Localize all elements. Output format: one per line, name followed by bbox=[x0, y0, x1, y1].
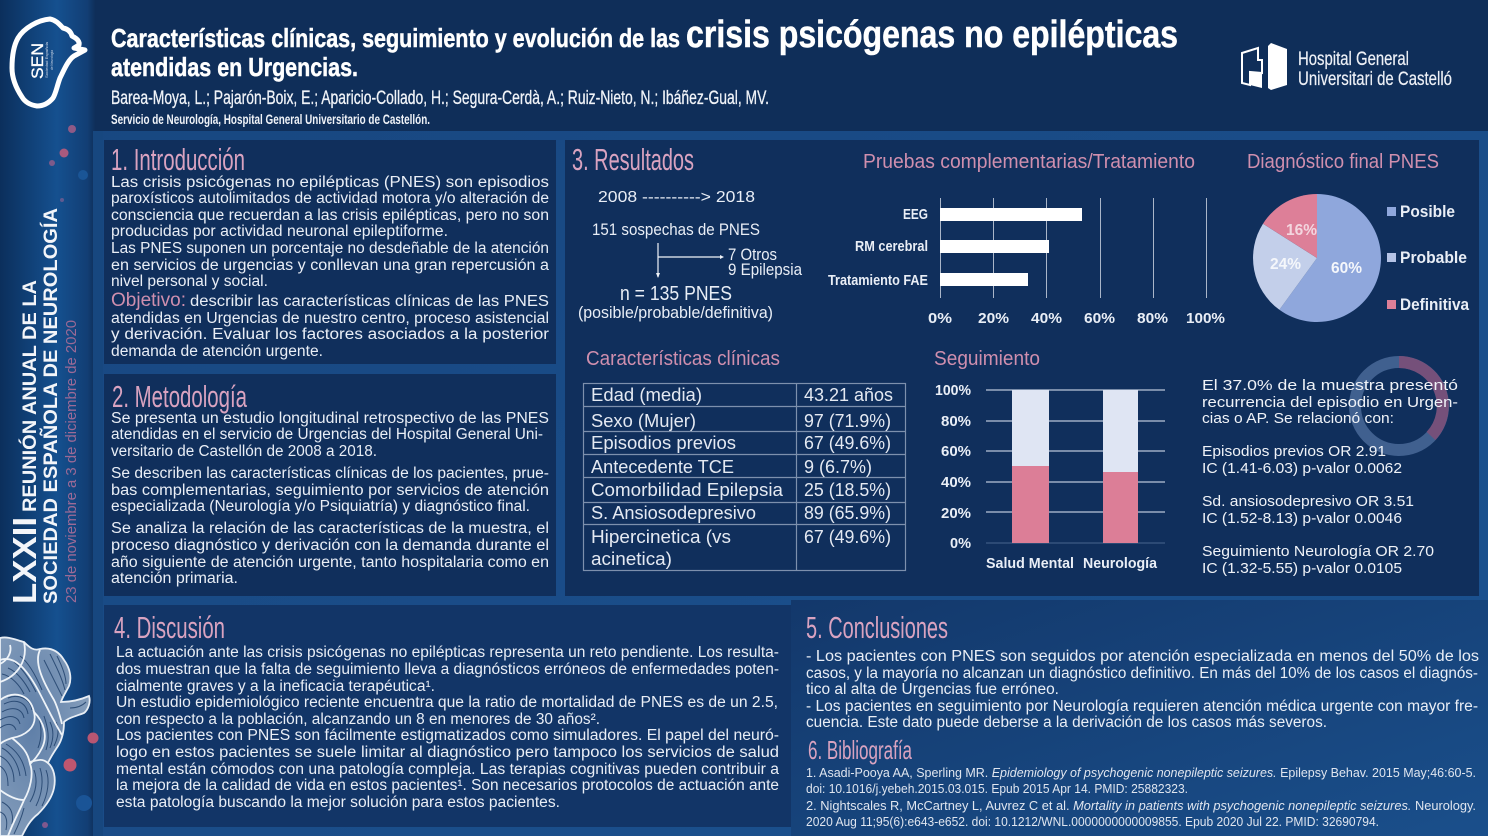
text block: recurrencia: Sd. ansiosodepresivo OR 3.51 bbox=[1202, 493, 1414, 510]
text block: bibliografía: 1. Asadi-Pooya AA, Sperling MR. Epidemiology of psychogenic nonepileptic seizures. Epilepsy Behav. 2015 May;46:60-5. bbox=[806, 766, 1476, 780]
bar chart: pruebas complementarias: Tratamiento FAE bbox=[828, 272, 928, 289]
pie chart: diagnóstico final: 24% bbox=[1270, 256, 1301, 273]
text block: introducción: atendidas en Urgencias de nuestro centro, proceso asistencial bbox=[111, 310, 549, 327]
text block: recurrencia: El 37.0% de la muestra presentó bbox=[1202, 377, 1458, 394]
decorative dots bbox=[42, 125, 98, 828]
text block: metodología: atención primaria. bbox=[111, 570, 238, 587]
text block: introducción: paroxísticos autolimitados de actividad motora y/o alteración de bbox=[111, 190, 549, 207]
text block: recurrencia bbox=[1202, 377, 1458, 577]
stacked bar chart: seguimiento bbox=[935, 382, 1165, 572]
pie chart: diagnóstico final: 16% bbox=[1286, 222, 1317, 239]
header band bbox=[95, 0, 1488, 131]
table: características clínicas: acinetica) bbox=[591, 549, 672, 569]
text block: introducción: y derivación. Evaluar los factores asociados a la posterior bbox=[111, 326, 549, 343]
patient flow diagram: (posible/probable/definitiva) bbox=[578, 303, 773, 322]
sidebar conference title: SOCIEDAD ESPAÑOLA DE NEUROLOGÍA bbox=[40, 208, 62, 604]
heading: discusión: 4. Discusión bbox=[114, 610, 225, 645]
stacked bar chart: seguimiento: 20% bbox=[941, 505, 971, 522]
text block: introducción: Las crisis psicógenas no epilépticas (PNES) son episodios bbox=[111, 174, 549, 191]
patient flow diagram: 9 Epilepsia bbox=[728, 260, 802, 279]
heading: resultados: 3. Resultados bbox=[572, 142, 694, 177]
stacked bar chart: seguimiento: 0% bbox=[950, 535, 971, 552]
table: características clínicas: Edad (media) bbox=[591, 385, 702, 405]
table: características clínicas bbox=[584, 383, 906, 570]
text block: introducción: Las PNES suponen un porcentaje no desdeñable de la atención bbox=[111, 240, 549, 257]
heading: conclusiones: 5. Conclusiones bbox=[806, 610, 948, 645]
text block: recurrencia: IC (1.32-5.55) p-valor 0.0105 bbox=[1202, 560, 1402, 577]
stacked bar chart: seguimiento: Neurología bbox=[1083, 555, 1158, 572]
sidebar conference title: REUNIÓN ANUAL DE LA bbox=[19, 280, 41, 512]
bar chart: pruebas complementarias: 60% bbox=[1084, 310, 1115, 327]
patient flow diagram: n = 135 PNES bbox=[620, 283, 732, 305]
stacked bar chart: seguimiento: 40% bbox=[941, 474, 971, 491]
text block: introducción: nivel personal y social. bbox=[111, 273, 268, 290]
table: características clínicas: Hipercinetica (vs bbox=[591, 527, 731, 547]
affiliation: Servicio de Neurología, Hospital General Universitario de Castellón. bbox=[111, 112, 430, 127]
text block: conclusiones: tico al alta de Urgencias fue erróneo. bbox=[806, 681, 1059, 698]
stacked bar chart: seguimiento: 100% bbox=[935, 382, 971, 399]
stacked bar chart: seguimiento: 80% bbox=[941, 413, 971, 430]
heading: metodología: 2. Metodología bbox=[112, 379, 247, 414]
table: características clínicas: 43.21 años bbox=[804, 385, 893, 405]
pie legend: Posible bbox=[1400, 202, 1455, 221]
text block: bibliografía: 2. Nightscales R, McCartney L, Auvrez C et al. Mortality in patients with psychogenic nonepileptic seizures. Neurology. bbox=[806, 799, 1476, 813]
text block: discusión: La actuación ante las crisis psicógenas no epilépticas representa un reto pendiente. Los resulta- bbox=[116, 644, 779, 661]
stacked bar chart: seguimiento: 60% bbox=[941, 443, 971, 460]
sidebar conference title: LXXII bbox=[6, 517, 43, 604]
table: características clínicas: S. Ansiosodepresivo bbox=[591, 503, 756, 523]
text block: recurrencia: recurrencia del episodio en Urgen- bbox=[1202, 394, 1458, 411]
text block: conclusiones: cuencia. Este dato puede deberse a la derivación de los casos más severos. bbox=[806, 714, 1327, 731]
title bbox=[111, 14, 1178, 82]
patient flow diagram: 2008 ----------> 2018 bbox=[598, 189, 755, 206]
text block: metodología: atendidas en el servicio de Urgencias del Hospital General Uni- bbox=[111, 426, 543, 443]
bar chart: pruebas complementarias: EEG bbox=[903, 206, 928, 223]
text block: discusión: con respecto a la población, alcanzando un 8 en menores de 30 años². bbox=[116, 711, 600, 728]
patient flow diagram: 151 sospechas de PNES bbox=[592, 220, 760, 239]
text block: discusión: logo en estos pacientes se suele limitar al diagnóstico pero tampoco los servicios de salud bbox=[116, 744, 779, 761]
text block: introducción: consciencia que recuerdan a las crisis epilépticas, pero no son bbox=[111, 207, 549, 224]
panel: conclusiones y bibliografía bbox=[791, 600, 1488, 836]
donut chart: recurrencia bbox=[1355, 362, 1443, 450]
text block: introducción: describir las características clínicas de las PNES bbox=[190, 293, 549, 310]
text block: discusión: Un estudio epidemiológico reciente encuentra que la ratio de mortalidad de PNES es de un 2.5, bbox=[116, 694, 778, 711]
patient flow diagram bbox=[578, 189, 802, 322]
patient flow diagram: 7 Otros bbox=[728, 245, 777, 264]
authors: Barea-Moya, L.; Pajarón-Boix, E.; Aparicio-Collado, H.; Segura-Cerdà, A.; Ruiz-Nieto, N.; Ibáñez-Gual, MV. bbox=[111, 88, 769, 109]
text block: introducción: en servicios de urgencias y conllevan una gran repercusión a bbox=[111, 257, 549, 274]
text block: bibliografía: 2020 Aug 11;95(6):e643-e652. doi: 10.1212/WNL.0000000000009855. Epub 2020 Jul 22. PMID: 32690794. bbox=[806, 815, 1379, 829]
sidebar conference title bbox=[6, 208, 80, 604]
text block: introducción: producidas por actividad neuronal epileptiforme. bbox=[111, 223, 448, 240]
text block: bibliografía bbox=[806, 766, 1476, 829]
heading: introducción: 1. Introducción bbox=[111, 142, 245, 177]
bar chart: pruebas complementarias: 0% bbox=[928, 310, 952, 327]
heading: pruebas complementarias: Pruebas complementarias/Tratamiento bbox=[863, 151, 1195, 173]
brain illustration bbox=[0, 637, 90, 836]
table: características clínicas: 25 (18.5%) bbox=[804, 480, 891, 500]
bar chart: pruebas complementarias: RM cerebral bbox=[855, 238, 928, 255]
logo: SEN: SEN bbox=[28, 43, 47, 79]
stacked bar chart: seguimiento: Salud Mental bbox=[986, 555, 1074, 572]
pie chart: diagnóstico final bbox=[1253, 194, 1469, 322]
logo: SEN: de Neurología bbox=[49, 49, 54, 70]
sidebar conference title: 23 de noviembre a 3 de diciembre de 2020 bbox=[64, 320, 80, 603]
bar chart: pruebas complementarias: 80% bbox=[1137, 310, 1168, 327]
text block: introducción: Objetivo: bbox=[111, 290, 186, 311]
text block: recurrencia: IC (1.52-8.13) p-valor 0.0046 bbox=[1202, 510, 1402, 527]
bar chart: pruebas complementarias: 40% bbox=[1031, 310, 1062, 327]
bar chart: pruebas complementarias: 20% bbox=[978, 310, 1009, 327]
table: características clínicas: Antecedente TCE bbox=[591, 457, 734, 477]
table: características clínicas: Episodios previos bbox=[591, 433, 736, 453]
text block: discusión: la mejora de la calidad de vida en estos pacientes¹. Son necesarios protocolos de actuación ante bbox=[116, 777, 779, 794]
table: características clínicas: Sexo (Mujer) bbox=[591, 411, 696, 431]
hospital logo: Universitari de Castelló bbox=[1298, 69, 1452, 90]
table: características clínicas: 97 (71.9%) bbox=[804, 411, 891, 431]
panel: metodología bbox=[104, 374, 556, 596]
text block: introducción: demanda de atención urgente. bbox=[111, 343, 323, 360]
text block: metodología: bas complementarias, seguimiento por servicios de atención bbox=[111, 482, 549, 499]
text block: recurrencia: IC (1.41-6.03) p-valor 0.0062 bbox=[1202, 460, 1402, 477]
text block: discusión: Los pacientes con PNES son fácilmente estigmatizados como simuladores. El papel del neuró- bbox=[116, 727, 779, 744]
hospital logo bbox=[1242, 43, 1452, 90]
heading: bibliografía: 6. Bibliografía bbox=[808, 735, 912, 765]
text block: discusión: dos muestran que la falta de seguimiento lleva a diagnósticos erróneos de enfermedades poten- bbox=[116, 661, 779, 678]
panel: resultados bbox=[565, 140, 1479, 596]
text block: metodología bbox=[111, 410, 549, 587]
text block: conclusiones: casos, y la mayoría no alcanzan un diagnóstico definitivo. En más del 10% de los casos el diagnós- bbox=[806, 665, 1478, 682]
heading: diagnóstico final: Diagnóstico final PNES bbox=[1247, 151, 1439, 173]
text block: metodología: Se analiza la relación de las características de la muestra, el bbox=[111, 520, 549, 537]
text block: metodología: Se presenta un estudio longitudinal retrospectivo de las PNES bbox=[111, 410, 549, 427]
table: características clínicas: Comorbilidad Epilepsia bbox=[591, 480, 784, 500]
text block: discusión: cialmente graves y a la ineficacia terapéutica¹. bbox=[116, 678, 435, 695]
bar chart: pruebas complementarias bbox=[828, 198, 1225, 327]
pie legend bbox=[1387, 202, 1469, 314]
text block: recurrencia: Episodios previos OR 2.91 bbox=[1202, 443, 1386, 460]
text block: metodología: año siguiente de atención urgente, tanto hospitalaria como en bbox=[111, 554, 549, 571]
pie chart: diagnóstico final: 60% bbox=[1331, 260, 1362, 277]
table: características clínicas: 9 (6.7%) bbox=[804, 457, 872, 477]
title: Características clínicas, seguimiento y evolución de las bbox=[111, 23, 680, 53]
text block: discusión: mental están cómodos con una patología compleja. Las terapias cognitivas pueden contribuir a bbox=[116, 761, 779, 778]
logo: SEN bbox=[12, 19, 85, 106]
text block: recurrencia: Seguimiento Neurología OR 2.70 bbox=[1202, 543, 1434, 560]
title: crisis psicógenas no epilépticas bbox=[686, 14, 1178, 56]
text block: metodología: especializada (Neurología y/o Psiquiatría) y diagnóstico final. bbox=[111, 498, 530, 515]
text block: introducción bbox=[111, 174, 549, 360]
pie legend: Probable bbox=[1400, 248, 1467, 267]
hospital logo: Hospital General bbox=[1298, 49, 1409, 70]
panel: introducción bbox=[104, 140, 556, 364]
sidebar bbox=[0, 0, 103, 836]
table: características clínicas: 67 (49.6%) bbox=[804, 527, 891, 547]
table: características clínicas: 89 (65.9%) bbox=[804, 503, 891, 523]
text block: conclusiones: - Los pacientes en seguimiento por Neurología requieren atención médica urgente con mayor fre- bbox=[806, 698, 1478, 715]
text block: metodología: proceso diagnóstico y derivación con la demanda durante el bbox=[111, 537, 549, 554]
bar chart: pruebas complementarias: 100% bbox=[1186, 310, 1225, 327]
table: características clínicas: 67 (49.6%) bbox=[804, 433, 891, 453]
text block: bibliografía: doi: 10.1016/j.yebeh.2015.03.015. Epub 2015 Apr 14. PMID: 25882323. bbox=[806, 782, 1188, 796]
panel: discusión bbox=[104, 605, 791, 827]
pie legend: Definitiva bbox=[1400, 295, 1469, 314]
text block: metodología: Se describen las características clínicas de los pacientes, prue- bbox=[111, 465, 549, 482]
title: atendidas en Urgencias. bbox=[111, 52, 358, 82]
text block: metodología: versitario de Castellón de 2008 a 2018. bbox=[111, 443, 377, 460]
text block: discusión: esta patología buscando la mejor solución para estos pacientes. bbox=[116, 794, 560, 811]
text block: recurrencia: cias o AP. Se relacionó con: bbox=[1202, 410, 1394, 427]
text block: conclusiones: - Los pacientes con PNES son seguidos por atención especializada en menos del 50% de los bbox=[806, 648, 1479, 665]
text block: discusión bbox=[116, 644, 779, 811]
logo: SEN: Sociedad Española bbox=[44, 41, 49, 78]
heading: características clínicas: Características clínicas bbox=[586, 348, 780, 370]
text block: conclusiones bbox=[806, 648, 1479, 731]
heading: seguimiento: Seguimiento bbox=[934, 348, 1040, 370]
